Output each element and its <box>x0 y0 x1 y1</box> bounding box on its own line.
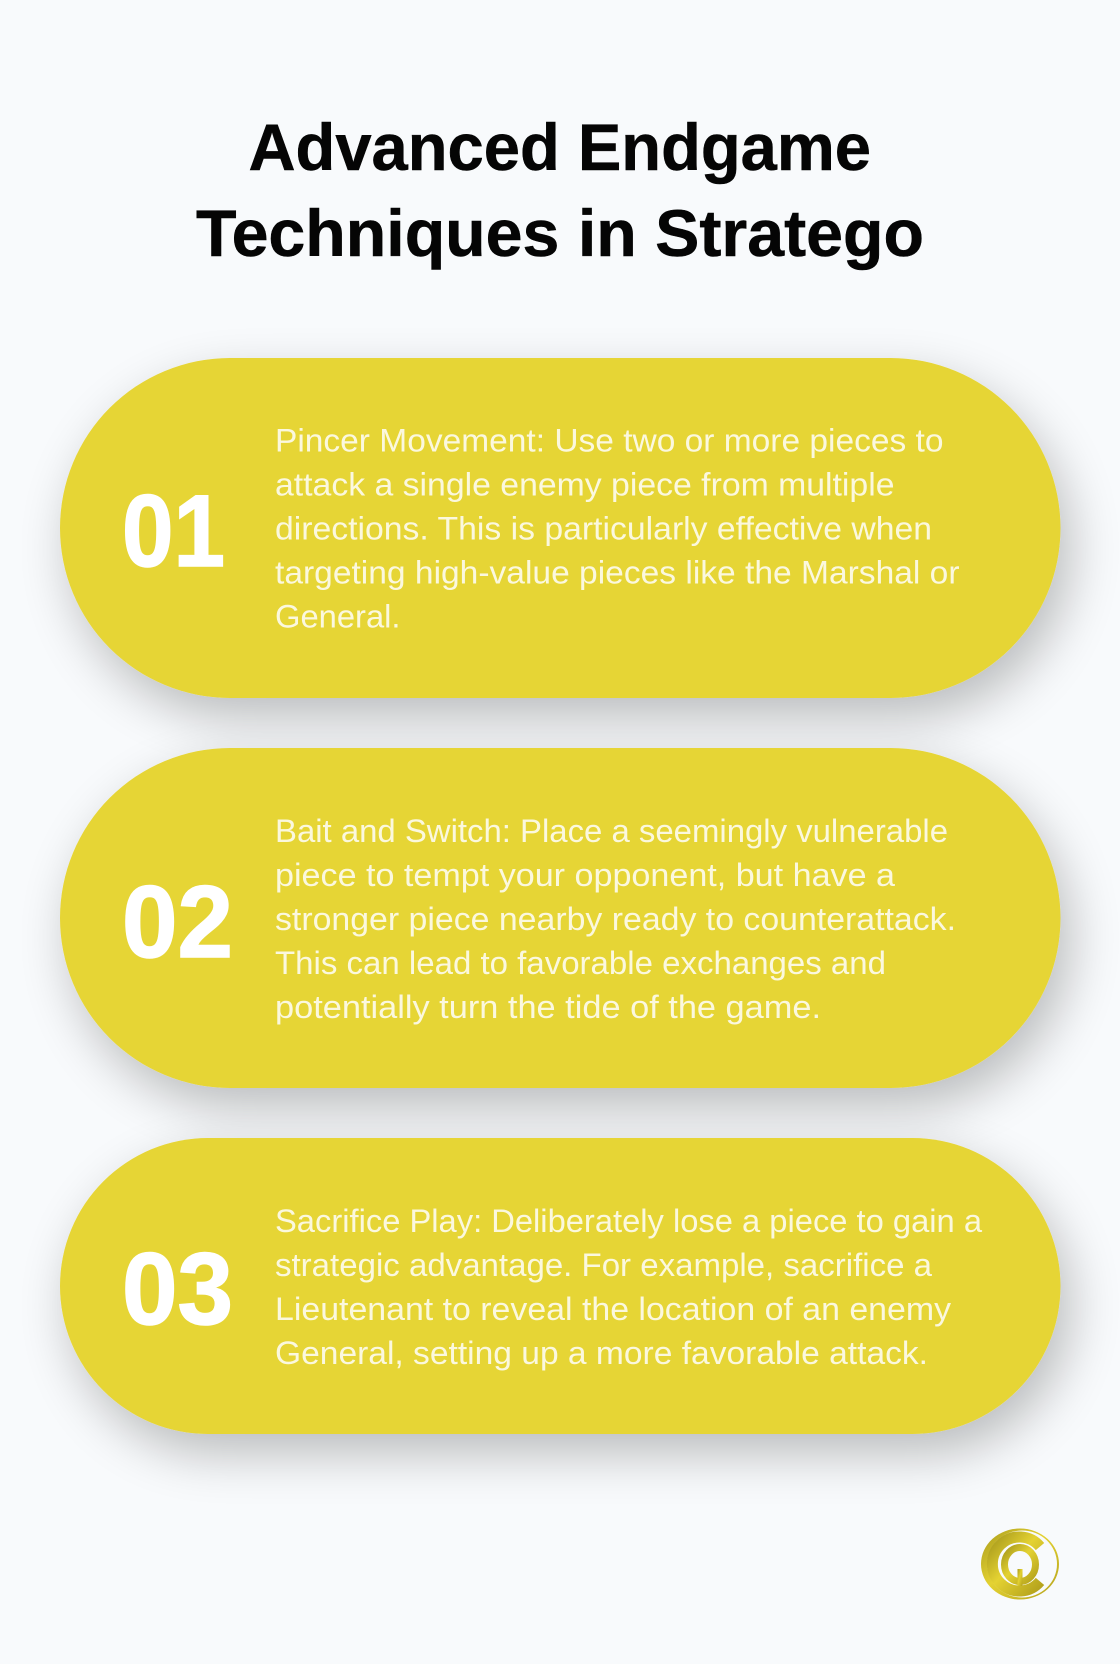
text block: Bait and Switch: Bait and Switch: Place a seemingly vulnerable <box>275 813 948 849</box>
title: Techniques in Stratego <box>196 196 924 270</box>
text block: Sacrifice Play: General, setting up a more favorable attack. <box>275 1335 928 1371</box>
panel: step 03 Sacrifice Play <box>60 1138 1060 1434</box>
text block: Bait and Switch: This can lead to favorable exchanges and <box>275 945 886 981</box>
text block: Bait and Switch: piece to tempt your opponent, but have a <box>275 857 895 893</box>
text block: Pincer Movement: directions. This is particularly effective when <box>275 510 932 546</box>
text block: Sacrifice Play: Lieutenant to reveal the location of an enemy <box>275 1291 951 1327</box>
panel: step 01 Pincer Movement <box>60 358 1060 698</box>
title <box>196 110 924 270</box>
number 03: 03 <box>122 1232 233 1346</box>
text block: Sacrifice Play <box>275 1203 982 1371</box>
text block: Bait and Switch: stronger piece nearby ready to counterattack. <box>275 901 956 937</box>
text block: Pincer Movement <box>275 422 960 634</box>
text block: Bait and Switch <box>275 813 956 1025</box>
number 01: 01 <box>122 474 225 588</box>
text block: Pincer Movement: General. <box>275 598 400 634</box>
text block: Pincer Movement: targeting high-value pieces like the Marshal or <box>275 554 960 590</box>
panel: step 02 Bait and Switch <box>60 748 1060 1088</box>
title: Advanced Endgame <box>248 110 871 184</box>
text block: Pincer Movement: Pincer Movement: Use two or more pieces to <box>275 422 944 458</box>
number 02: 02 <box>122 865 233 979</box>
text block: Sacrifice Play: strategic advantage. For example, sacrifice a <box>275 1247 932 1283</box>
text block: Sacrifice Play: Sacrifice Play: Deliberately lose a piece to gain a <box>275 1203 982 1239</box>
icon: logo <box>981 1528 1059 1599</box>
text block: Bait and Switch: potentially turn the tide of the game. <box>275 989 821 1025</box>
text block: Pincer Movement: attack a single enemy piece from multiple <box>275 466 894 502</box>
